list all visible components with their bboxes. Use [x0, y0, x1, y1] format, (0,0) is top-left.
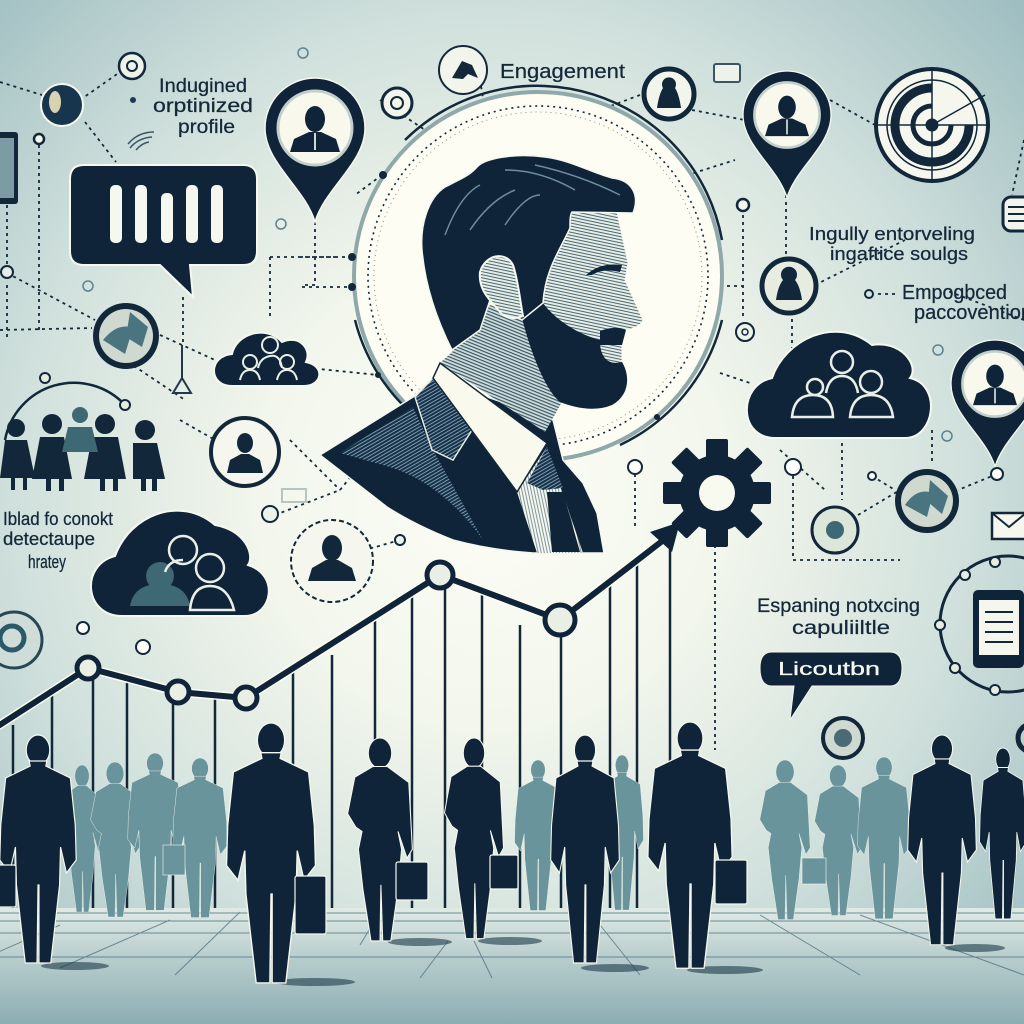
lapel: [415, 378, 472, 460]
jacket hatching: [340, 407, 483, 540]
collar: [433, 363, 547, 492]
jacket: [320, 378, 604, 553]
callout badge: [760, 652, 902, 720]
text: lower left: hratey: [28, 552, 66, 572]
optimized profile text: profile: [178, 117, 235, 138]
text: expanding: Espaning notxcing: [757, 596, 920, 617]
right edge icon: [1018, 724, 1024, 752]
central portrait circle: [348, 86, 722, 460]
envelope icon: [992, 513, 1024, 539]
network connector lines: [0, 72, 1024, 750]
cloud: right: [747, 332, 931, 438]
text: expanding: [757, 596, 920, 639]
speech bubble with bars: [70, 165, 257, 297]
beard: [522, 303, 627, 409]
optimized profile text: Indugined: [159, 76, 247, 97]
text: lower left: Iblad fo conokt: [3, 509, 113, 529]
network ring with tablet: [935, 556, 1024, 695]
background silhouettes: [62, 753, 911, 920]
tie: [547, 492, 580, 552]
gear icon: [663, 439, 771, 547]
chart drop lines: [13, 540, 670, 908]
text: lower left: [3, 509, 113, 572]
text: right heading: Ingully entorveling: [809, 224, 975, 244]
shirt: [517, 447, 583, 553]
left lens icon: [0, 612, 42, 668]
globes: [93, 303, 959, 758]
engagement text: Engagement: [500, 61, 625, 83]
floor shadows: [41, 937, 1005, 986]
cloud: lower left: [91, 511, 269, 616]
text: lower left: detectaupe: [3, 529, 95, 549]
engagement icon: [439, 46, 487, 94]
optimized profile text: [153, 76, 253, 138]
engagement label: [439, 46, 625, 94]
hair highlights: [445, 165, 620, 235]
callout badge: Licoutbn: [778, 659, 880, 679]
neck: [440, 305, 562, 432]
text: right heading: ingaftice soulgs: [830, 244, 968, 264]
faint decorative circles: [83, 48, 952, 441]
location pin right: [743, 71, 831, 198]
face: [540, 212, 643, 370]
text: expanding: capuliiltle: [792, 618, 890, 639]
small icons: [77, 64, 1024, 654]
radar icon: [876, 69, 988, 181]
cloud: top left: [214, 333, 319, 386]
central portrait: [320, 156, 643, 553]
foreground silhouettes: [0, 722, 1024, 983]
profile avatars: [211, 418, 373, 602]
floor grid: [0, 908, 1024, 1024]
optimized profile text: orptinized: [153, 96, 253, 117]
text: empowered: Empogbced: [902, 282, 1007, 304]
location pin far right: [951, 340, 1024, 467]
left ring with people: [0, 373, 165, 491]
location pin left: [265, 78, 365, 222]
eye: [586, 264, 622, 275]
hair: [422, 156, 635, 350]
text: empowered: [865, 282, 1024, 324]
growth line chart: [0, 522, 680, 728]
ear: [480, 256, 523, 318]
top left icons: [0, 53, 154, 278]
text: right heading: [809, 224, 975, 264]
